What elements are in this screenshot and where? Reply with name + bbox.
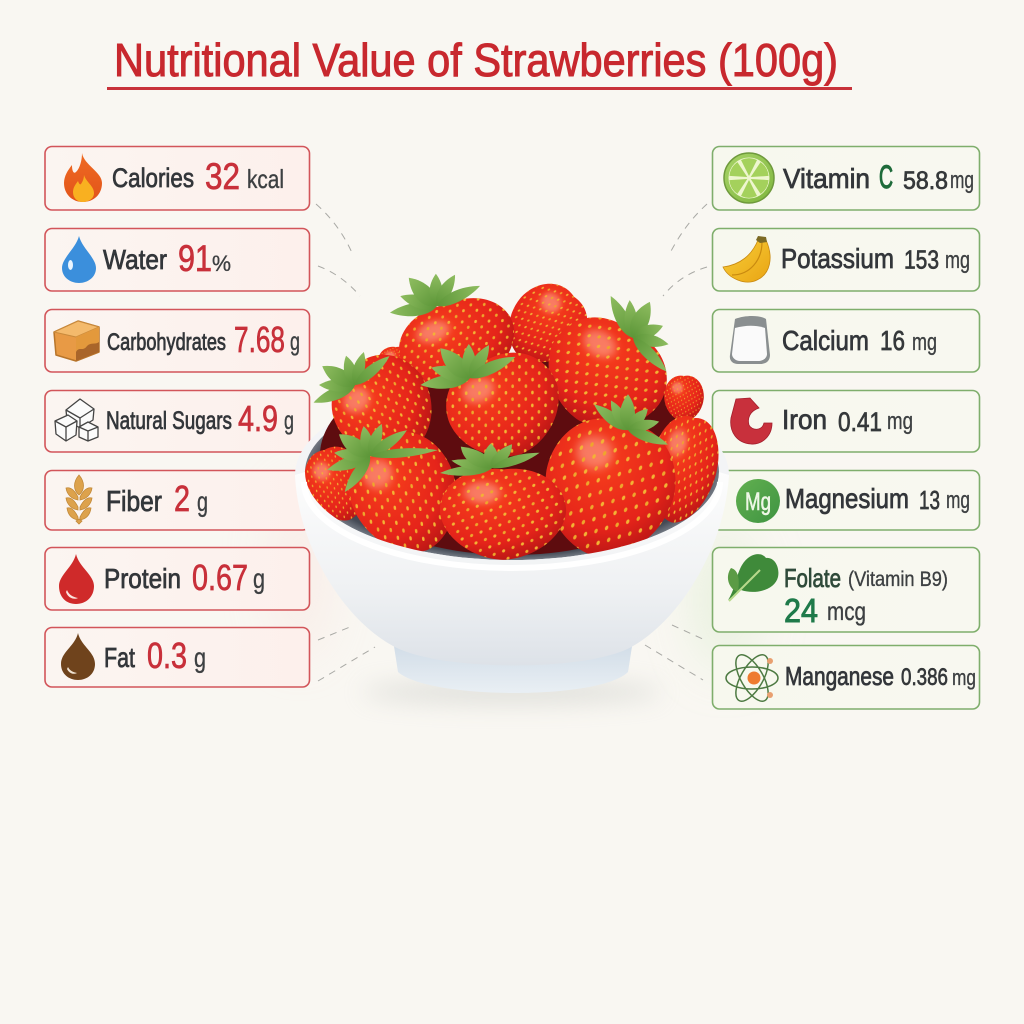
icon: calcium jar (730, 316, 770, 364)
value: 0.41 mg: mg (887, 408, 913, 435)
icon: magnesium badge (736, 479, 780, 523)
icon: lime slice (724, 153, 774, 203)
card: carbohydrates (45, 310, 310, 372)
label: magnesium: Magnesium (785, 483, 909, 514)
value: 2 g: g (197, 486, 208, 517)
icon: iron (731, 398, 772, 444)
value: 13 mg: mg (946, 487, 970, 514)
value: 7.68 g: g (290, 326, 300, 356)
soft glow: left of bowl (270, 480, 330, 660)
value: 7.68 g: 7.68 (234, 319, 285, 360)
label: potassium: Potassium (781, 243, 894, 274)
label: folate (vitamin b9): (Vitamin B9) (848, 568, 948, 591)
label: calcium: Calcium (782, 325, 869, 356)
soft glow: right of bowl (695, 530, 755, 670)
value: 32 kcal: kcal (247, 164, 284, 194)
bowl shadow (362, 680, 662, 704)
icon: red drop (59, 554, 94, 604)
icon: magnesium badge: Mg (745, 488, 771, 516)
value: 58.8 mg (903, 167, 974, 195)
icon: spinach leaf (728, 554, 778, 601)
icon: wheat (66, 475, 92, 524)
label: vitamin c: C (879, 159, 893, 195)
value: 4.9 g: g (284, 405, 294, 435)
label: calories: Calories (112, 163, 194, 193)
value: 153 mg: mg (945, 247, 970, 274)
bowl front (295, 472, 729, 666)
card: iron (712, 390, 980, 452)
icon: flame (64, 153, 102, 202)
value: 24 mcg: mcg (827, 596, 866, 626)
value: 2 g: 2 (174, 478, 190, 519)
value: 0.386 mg: 0.386 (901, 664, 948, 691)
label: fat: Fat (104, 642, 135, 673)
value: 2 g (174, 478, 208, 519)
card: water (45, 228, 310, 291)
icon: atom (726, 650, 778, 706)
value: 13 mg (919, 485, 970, 515)
value: 153 mg: 153 (904, 244, 939, 274)
label: vitamin c: Vitamin (783, 163, 870, 194)
value: 0.67 g: 0.67 (192, 557, 248, 598)
value: 32 kcal: 32 (205, 156, 240, 197)
value: 32 kcal (205, 156, 284, 197)
value: 16 mg: mg (912, 329, 937, 356)
card: folate (712, 548, 980, 632)
label: iron: Iron (782, 404, 827, 435)
bowl foot (393, 640, 633, 693)
bowl of strawberries (295, 270, 729, 693)
card: natural sugars (45, 390, 310, 452)
card: manganese (712, 646, 980, 709)
value: 24 mcg (784, 592, 866, 629)
card: calories (45, 146, 310, 210)
card: calcium (712, 310, 980, 372)
value: 13 mg: 13 (919, 485, 940, 515)
value: 0.386 mg: mg (952, 665, 976, 690)
value: 153 mg (904, 244, 970, 274)
card: fiber (45, 470, 310, 530)
value: 0.3 g: 0.3 (147, 635, 187, 676)
card: fat (45, 628, 310, 687)
value: 58.8 mg: mg (950, 167, 974, 194)
value: 91 %: % (212, 251, 231, 276)
strawberries (296, 270, 727, 570)
value: 0.3 g: g (194, 642, 206, 673)
bowl back and interior (295, 355, 729, 570)
value: 91 %: 91 (178, 238, 212, 279)
icon: carbohydrate block (54, 321, 99, 361)
value: 4.9 g: 4.9 (238, 398, 278, 439)
card: magnesium (712, 470, 980, 530)
icon: water drop (62, 236, 96, 283)
icon: sugar cubes (55, 399, 98, 441)
value: 24 mcg: 24 (784, 592, 818, 629)
icon: brown drop (61, 633, 95, 680)
value: 58.8 mg: 58.8 (903, 167, 948, 195)
icon: banana (723, 236, 770, 282)
connector lines (316, 204, 707, 681)
label: water: Water (103, 244, 167, 275)
value: 16 mg: 16 (880, 325, 905, 356)
label: fiber: Fiber (106, 486, 162, 518)
card: vitamin c (712, 146, 980, 210)
title: Nutritional Value of Strawberries (100g) (114, 34, 838, 86)
value: 16 mg (880, 325, 937, 356)
label: carbohydrates: Carbohydrates (107, 329, 226, 356)
card: potassium (712, 228, 980, 291)
label: manganese: Manganese (785, 661, 894, 691)
value: 0.41 mg: 0.41 (838, 407, 882, 437)
bowl rim highlight (304, 482, 720, 568)
card: protein (45, 548, 310, 610)
label: folate (vitamin b9) (784, 563, 948, 593)
value: 0.67 g: g (253, 563, 265, 594)
label: natural sugars: Natural Sugars (106, 407, 232, 435)
label: folate (vitamin b9): Folate (784, 563, 841, 593)
label: protein: Protein (104, 563, 181, 594)
